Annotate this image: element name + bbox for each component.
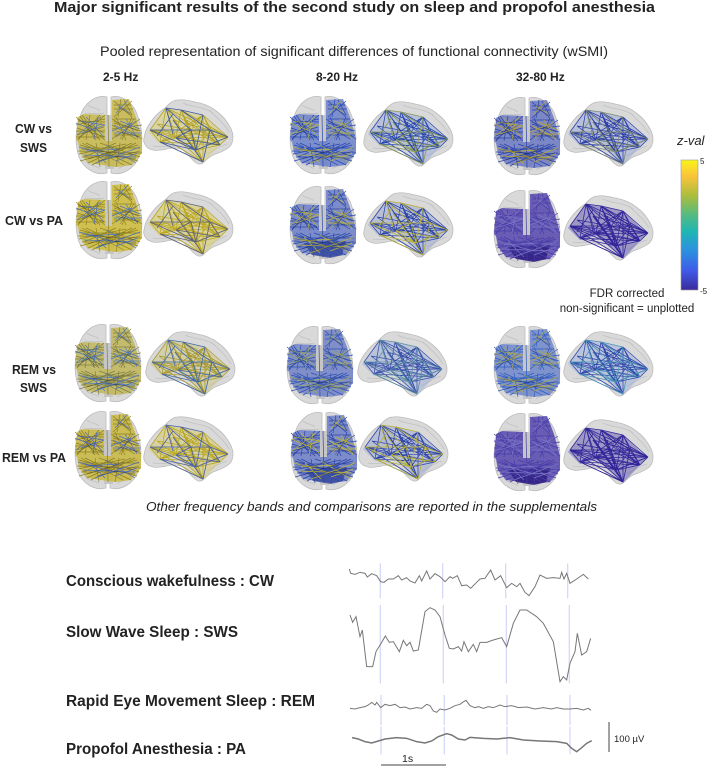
trace: CW: [349, 569, 588, 596]
second markers: [380, 563, 570, 754]
dorsal view: [494, 326, 560, 404]
note: FDR correction: [560, 288, 694, 315]
dorsal view: [290, 96, 356, 174]
row labels: SWS: [20, 140, 47, 155]
lateral view: [358, 332, 447, 396]
note: other frequency bands: Other frequency bands and comparisons are reported in the supplementals: [146, 499, 598, 514]
brains: CW vs PA 2-5 Hz: [76, 181, 233, 259]
trace: SWS: [350, 608, 591, 682]
lateral view: [364, 193, 453, 257]
amplitude scale bar: [609, 722, 645, 752]
dorsal view: [494, 190, 560, 268]
brain matrix: [75, 96, 653, 491]
state labels: [66, 573, 315, 758]
scale label: 100 µV: [614, 734, 645, 745]
time scale bar: [381, 753, 446, 765]
brains: REM vs PA 2-5 Hz: [75, 411, 233, 489]
dorsal view: [76, 181, 142, 259]
state labels: Propofol Anesthesia : PA: [66, 741, 246, 758]
scale line: [608, 722, 610, 752]
column headings: frequency bands: 8-20 Hz: [316, 70, 358, 84]
brains: CW vs PA 8-20 Hz: [290, 186, 453, 264]
brains: REM vs SWS 8-20 Hz: [287, 326, 447, 404]
dorsal view: [291, 412, 357, 490]
brains: CW vs SWS 32-80 Hz: [494, 97, 653, 175]
dorsal view: [75, 324, 141, 402]
brains: REM vs PA 8-20 Hz: [291, 412, 448, 490]
lateral view: [564, 102, 653, 166]
column headings: frequency bands: [103, 70, 565, 84]
colorbar legend: z-val: [676, 133, 708, 296]
row labels: [2, 121, 67, 465]
lateral view: [144, 100, 233, 164]
lateral view: [144, 417, 233, 481]
lateral view: [144, 192, 233, 256]
dorsal view: [287, 326, 353, 404]
row labels: CW vs PA: [5, 213, 64, 228]
brains: CW vs SWS 8-20 Hz: [290, 96, 453, 174]
row labels: CW vs: [15, 121, 52, 136]
row labels: REM vs PA: [2, 450, 67, 465]
scale line: [381, 764, 446, 766]
colorbar gradient: [681, 160, 698, 290]
lateral view: [364, 102, 453, 166]
colorbar min: -5: [700, 287, 708, 296]
state labels: Rapid Eye Movement Sleep : REM: [66, 693, 315, 710]
EEG traces: [349, 563, 592, 754]
brains: REM vs SWS 32-80 Hz: [494, 326, 653, 404]
lateral view: [146, 332, 235, 396]
dorsal view: [290, 186, 356, 264]
brains: REM vs SWS 2-5 Hz: [75, 324, 235, 402]
colorbar max: 5: [700, 157, 705, 166]
lateral view: [359, 417, 448, 481]
row labels: SWS: [20, 380, 47, 395]
trace: PA: [352, 734, 592, 752]
dorsal view: [494, 97, 560, 175]
brains: CW vs SWS 2-5 Hz: [76, 96, 233, 174]
brains: REM vs PA 32-80 Hz: [494, 413, 653, 491]
subtitle: Pooled representation of significant differences of functional connectivity (wSMI): [100, 43, 608, 59]
lateral view: [564, 332, 653, 396]
column headings: frequency bands: 2-5 Hz: [103, 70, 138, 84]
note: FDR correction: non-significant = unplotted: [560, 303, 694, 315]
column headings: frequency bands: 32-80 Hz: [516, 70, 565, 84]
dorsal view: [494, 413, 560, 491]
state labels: Conscious wakefulness : CW: [66, 573, 274, 590]
trace: REM: [350, 700, 591, 712]
colorbar title: z-val: [676, 133, 706, 148]
state labels: Slow Wave Sleep : SWS: [66, 624, 238, 641]
brains: CW vs PA 32-80 Hz: [494, 190, 653, 268]
lateral view: [564, 196, 653, 260]
dorsal view: [75, 411, 141, 489]
lateral view: [564, 420, 653, 484]
row labels: REM vs: [12, 362, 56, 377]
note: FDR correction: FDR corrected: [590, 288, 664, 300]
scale label: 1s: [402, 753, 413, 765]
dorsal view: [76, 96, 142, 174]
